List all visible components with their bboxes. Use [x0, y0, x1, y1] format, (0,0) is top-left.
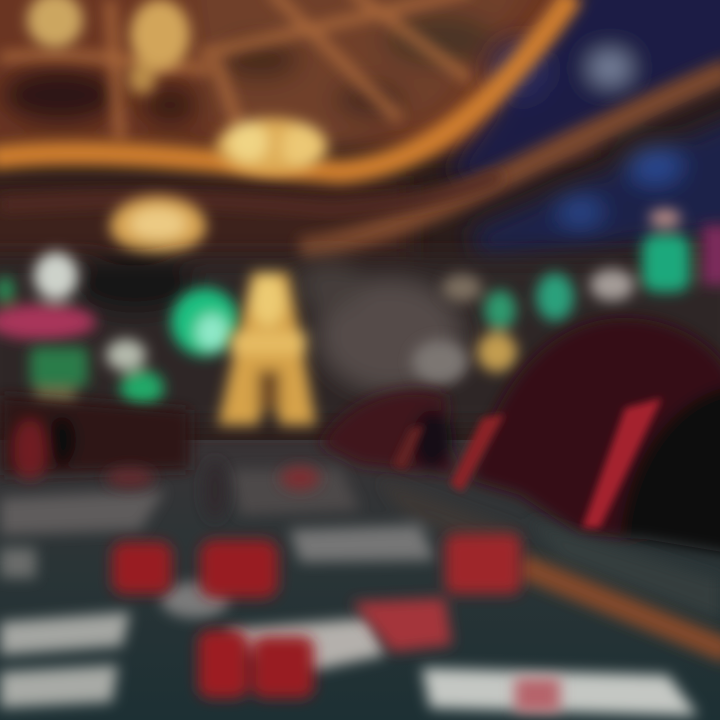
- lights: left white and pink umbrella: [0, 252, 96, 340]
- floor: grey table stripes: [0, 468, 720, 620]
- ceiling: right night-sky panel: [450, 0, 720, 260]
- chandelier: lower left: [110, 196, 206, 256]
- ceiling: warm brown vault: [0, 0, 590, 260]
- ceiling: orange lit arc: [0, 0, 572, 172]
- floor: red distant markers: [106, 460, 320, 520]
- lights: left green panels: [30, 339, 164, 412]
- seating: red stripes: [392, 398, 662, 528]
- seating: dark maroon arched booths: [0, 318, 720, 555]
- floor: white strips: [0, 612, 698, 716]
- ceiling: secondary beam: [0, 175, 500, 210]
- mid wall: dark band: [0, 257, 720, 428]
- chips: red stacks: [112, 534, 560, 712]
- light: central green glow: [171, 288, 239, 356]
- lights: right green and white signs: [412, 209, 720, 384]
- ceiling: lower brown diagonal beam: [300, 70, 720, 250]
- chandelier: top left: [27, 0, 190, 94]
- floor: orange diagonal rail: [520, 565, 720, 652]
- chandelier: centre: [216, 118, 328, 174]
- golden tower: [218, 272, 316, 425]
- ceiling: radiating ribs: [0, 0, 470, 140]
